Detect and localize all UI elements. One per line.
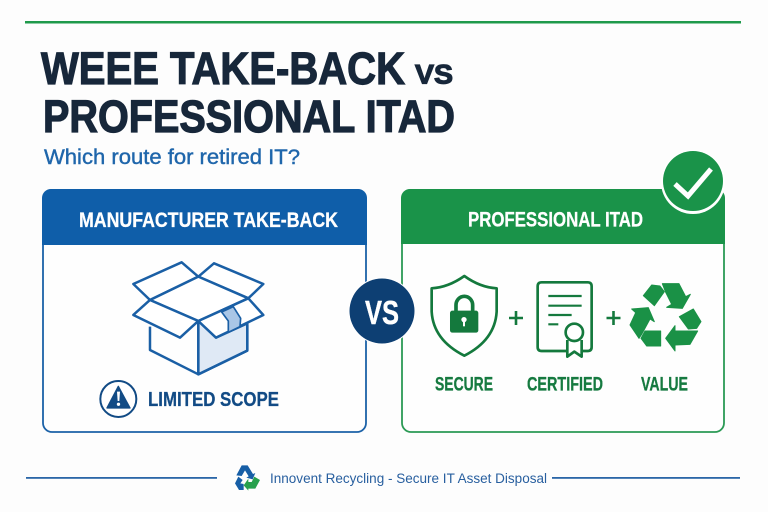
footer xyxy=(26,465,740,491)
icon: certificate xyxy=(538,282,592,357)
badge: VS xyxy=(348,278,416,344)
plus sign xyxy=(606,311,620,325)
label: limited scope: LIMITED SCOPE xyxy=(148,388,279,411)
icon: footer logo xyxy=(235,465,260,491)
panel header: professional ITAD xyxy=(401,189,725,244)
badge: VS: VS xyxy=(365,294,399,331)
heading: professional ITAD: PROFESSIONAL ITAD xyxy=(468,208,643,232)
subtitle: Which route for retired IT? xyxy=(44,146,300,169)
panel: professional ITAD xyxy=(401,189,725,432)
icon: open box xyxy=(133,262,263,374)
badge: check mark xyxy=(661,150,725,214)
icon: shield with lock xyxy=(432,276,497,356)
icon: warning xyxy=(100,381,136,417)
footer text: Innovent Recycling - Secure IT Asset Disposal xyxy=(270,471,547,486)
plus sign xyxy=(509,311,523,325)
icon: recycle xyxy=(630,284,701,351)
panel: manufacturer take-back xyxy=(42,189,367,432)
heading: manufacturer take-back: MANUFACTURER TAKE-BACK xyxy=(79,209,338,232)
title: VS xyxy=(415,60,453,90)
label: certified: CERTIFIED xyxy=(527,374,603,396)
title xyxy=(41,43,455,142)
label: secure: SECURE xyxy=(435,374,493,396)
title: WEEE TAKE-BACK xyxy=(41,43,405,94)
title: PROFESSIONAL ITAD xyxy=(43,91,455,142)
panel header: manufacturer take-back xyxy=(42,189,367,245)
label: value: VALUE xyxy=(641,374,688,396)
